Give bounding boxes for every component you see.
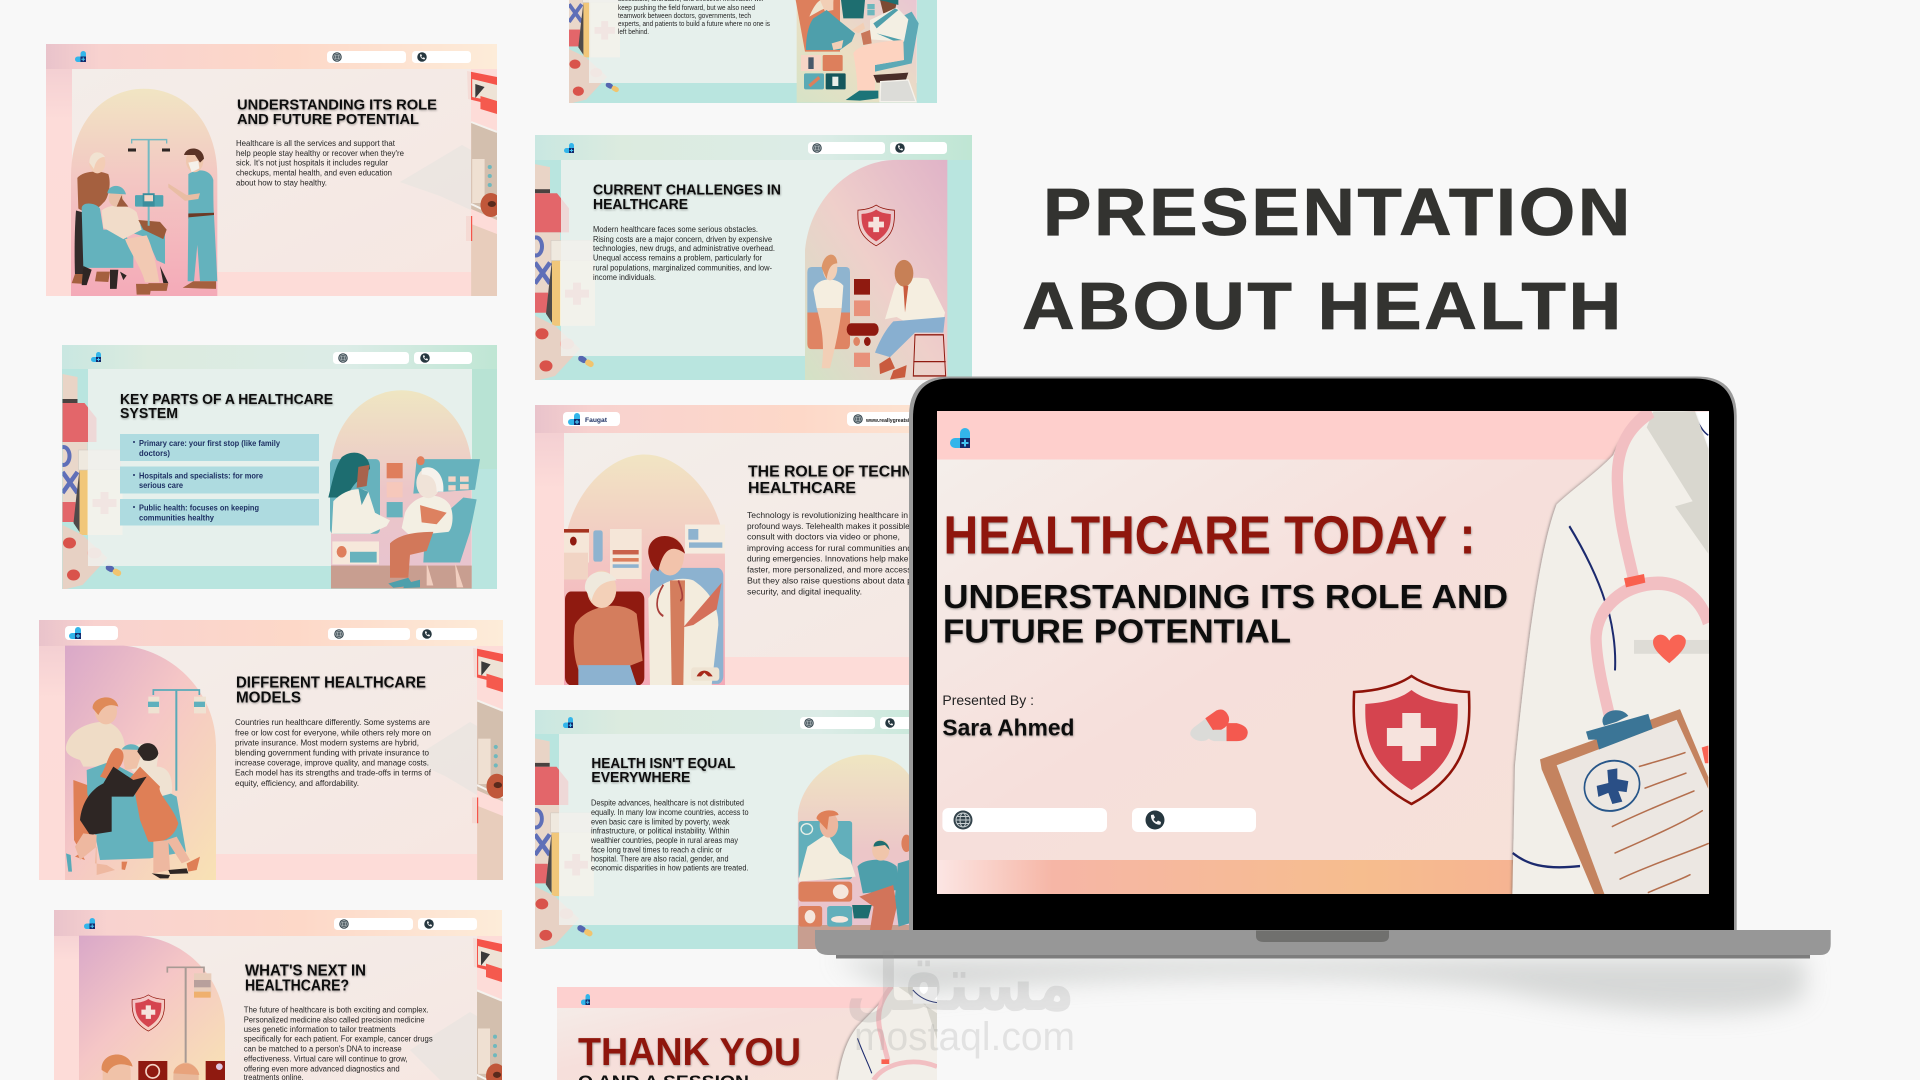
heading: DIFFERENT HEALTHCARE	[236, 674, 426, 692]
body text	[618, 0, 770, 36]
body text: teamwork between doctors, governments, tech	[618, 11, 751, 20]
heading: HEALTHCARE	[593, 197, 688, 213]
body text	[593, 225, 775, 282]
icon: brand chip with logo: Faugat	[585, 417, 608, 424]
icon: phone chip	[890, 142, 947, 154]
bullet: public health	[120, 499, 319, 526]
bullet: public health: Public health: focuses on keeping	[139, 504, 259, 512]
bullet: primary care	[120, 434, 319, 461]
body text: left behind.	[618, 27, 649, 36]
heading	[120, 392, 333, 422]
bullet: primary care: Primary care: your first stop (like family	[139, 439, 281, 448]
body text: Unequal access remains a problem, particularly for	[593, 254, 762, 263]
body text: Despite advances, healthcare is not distributed	[591, 799, 744, 808]
body text: offering even more advanced diagnostics and	[244, 1064, 400, 1073]
body text: consult with doctors via video or phone,	[747, 532, 900, 542]
body text: Each model has its strengths and trade-offs in terms of	[235, 768, 432, 778]
body text	[747, 510, 937, 596]
body text: specifically for each patient. For example, cancer drugs	[244, 1035, 433, 1044]
illustration: doctor and senior patient	[564, 454, 725, 685]
heading: HEALTH ISN'T EQUAL	[591, 755, 735, 772]
icon: website chip	[800, 717, 875, 729]
panel: slide fragment closing remarks	[565, 0, 937, 104]
icon: logo	[950, 428, 970, 448]
heading: UNDERSTANDING ITS ROLE	[237, 96, 437, 114]
body text: Modern healthcare faces some serious obstacles.	[593, 225, 758, 234]
bullet: public health: communities healthy	[139, 514, 215, 522]
presenter label: Presented By :	[942, 692, 1034, 708]
heading: CURRENT CHALLENGES IN	[593, 182, 781, 198]
panel: slide health isn't equal everywhere	[530, 710, 972, 950]
bullet: hospitals: serious care	[139, 481, 184, 490]
heading	[236, 674, 426, 706]
body text: face long travel times to reach a clinic or	[591, 845, 722, 854]
body text: free or low cost for everyone, while others rely more on	[235, 727, 431, 737]
heading	[593, 182, 781, 213]
body text	[235, 717, 432, 788]
icon: brand chip with logo	[563, 412, 620, 426]
heading: MODELS	[236, 690, 301, 706]
watermark: mostaql: mostaql.com	[854, 1015, 1075, 1059]
heading: THE ROLE OF TECHNOLOGY IN	[748, 464, 990, 480]
icon: phone chip	[414, 352, 472, 364]
phone chip	[1132, 808, 1256, 832]
bullet: hospitals	[120, 466, 319, 494]
panel: slide key parts of a healthcare system	[58, 345, 497, 590]
shadow under laptop	[835, 958, 1805, 1013]
title: presentation about health	[1022, 175, 1633, 344]
body text	[236, 139, 405, 188]
body text: increase coverage, improve quality, and manage costs.	[235, 758, 429, 768]
presenter name: Sara Ahmed	[942, 714, 1074, 740]
panel: slide current challenges in healthcare	[530, 135, 972, 381]
panel: slide understanding its role	[46, 44, 501, 297]
body text: income individuals.	[593, 273, 656, 282]
illustration: doctor coat with stethoscope and clipboard	[1512, 410, 1710, 896]
subtitle: FUTURE POTENTIAL	[943, 612, 1291, 650]
body text: effectiveness. Virtual care will continue to grow,	[244, 1054, 408, 1063]
panel: slide the role of technology in healthcare	[535, 405, 1015, 685]
icon: phone chip	[418, 918, 477, 930]
body text: checkups, mental health, and even education	[236, 168, 392, 178]
heading	[591, 755, 735, 786]
body text: uses genetic information to tailor treatments	[244, 1025, 396, 1034]
body text: blending government funding with private insurance to	[235, 748, 429, 758]
body text: even basic care is limited by poverty, weak	[591, 817, 731, 826]
body text: Personalized medicine also called precision medicine	[244, 1015, 425, 1024]
laptop base	[815, 930, 1831, 958]
icon: shield with cross	[1354, 676, 1469, 804]
website chip	[942, 808, 1107, 832]
illustration: shield, drip stand and patients	[79, 936, 225, 1080]
icon: website chip	[808, 142, 885, 154]
heading: KEY PARTS OF A HEALTHCARE	[120, 392, 333, 408]
body text: But they also raise questions about data privacy,	[747, 575, 937, 585]
title: healthcare today: HEALTHCARE TODAY :	[944, 506, 1476, 566]
body text: Rising costs are a major concern, driven by expensive	[593, 235, 773, 244]
body text: experts, and patients to build a future where no one is	[618, 19, 770, 28]
icon: website chip	[847, 412, 947, 426]
body text: profound ways. Telehealth makes it possible to	[747, 521, 919, 531]
bullet: hospitals: Hospitals and specialists: for more	[139, 472, 264, 480]
body text: sick. It's not just hospitals it includes regular	[236, 158, 388, 168]
illustration: shield with patient and doctor	[805, 160, 947, 380]
body text: wealthier countries, people in rural areas may	[590, 836, 738, 845]
panel: slide what's next in healthcare	[54, 910, 506, 1080]
body text: during emergencies. Innovations help make care	[747, 554, 927, 564]
body text: The future of healthcare is both exciting and complex.	[244, 1005, 429, 1014]
heading: AND FUTURE POTENTIAL	[237, 111, 419, 128]
body text: help people stay healthy or recover when they're	[236, 149, 405, 158]
icon: logo	[563, 717, 573, 728]
icon: website chip	[328, 628, 410, 640]
body text: about how to stay healthy.	[236, 178, 327, 188]
title: presentation about health: ABOUT HEALTH	[1022, 269, 1624, 344]
body text: rural populations, marginalized communities, and low-	[593, 263, 772, 272]
panel: slide thank you	[557, 987, 937, 1080]
heading	[748, 464, 990, 497]
watermark: mostaql: مستقل	[845, 939, 1075, 1029]
heading: SYSTEM	[120, 406, 178, 422]
body text: hospital. There are also racial, gender, and	[591, 855, 728, 864]
illustration: doctor talking to couple	[798, 755, 920, 949]
icon: logo	[91, 352, 101, 362]
body text: keep pushing the field forward, but we also need	[618, 3, 755, 12]
icon: logo	[564, 143, 574, 153]
body text: Countries run healthcare differently. Some systems are	[235, 717, 430, 727]
laptop screen	[937, 410, 1710, 896]
heading: HEALTHCARE?	[245, 978, 349, 994]
heading	[237, 99, 438, 126]
illustration: doctor and patient consultation	[796, 0, 919, 103]
illustration: doctor coat with stethoscope	[838, 987, 937, 1080]
icon: phone chip	[416, 628, 477, 640]
body text: equally. In many low income countries, access to	[591, 808, 749, 817]
body text	[244, 1005, 433, 1080]
illustration: doctor with elderly patient	[328, 390, 480, 589]
body text: can be matched to a person's DNA to increase	[244, 1044, 402, 1053]
icon: logo	[84, 918, 95, 929]
subtitle: UNDERSTANDING ITS ROLE AND	[943, 578, 1508, 615]
icon: website chip	[333, 352, 409, 364]
body text: infrastructure, or political instability. Within	[591, 827, 730, 836]
watermark: mostaql	[845, 939, 1075, 1059]
heading: thank you: THANK YOU	[578, 1031, 801, 1074]
body text	[590, 799, 749, 873]
heading: EVERYWHERE	[591, 769, 690, 786]
icon: logo chip	[65, 626, 118, 640]
laptop	[815, 376, 1831, 958]
icon: website chip: www.reallygreatsite.com	[865, 418, 926, 424]
laptop lid	[909, 376, 1737, 931]
icon: logo	[75, 51, 86, 62]
icon: capsules	[1190, 709, 1248, 741]
heading: WHAT'S NEXT IN	[245, 962, 366, 980]
body text: Healthcare is all the services and support that	[236, 139, 396, 148]
body text: faster, more personalized, and more accessible.	[747, 565, 927, 575]
illustration: family embracing patient	[65, 646, 216, 880]
icon: phone chip	[880, 717, 930, 729]
icon: website chip	[327, 51, 406, 63]
body text: security, and digital inequality.	[747, 586, 862, 596]
icon: logo	[581, 994, 590, 1005]
title: presentation about health: PRESENTATION	[1043, 175, 1633, 250]
icon: phone chip	[412, 51, 471, 63]
bullet: primary care: doctors)	[139, 449, 170, 458]
subtitle	[943, 578, 1508, 650]
body text: economic disparities in how patients are treated.	[591, 864, 748, 873]
body text: technologies, new drugs, and administrative overhead.	[593, 244, 775, 253]
panel: slide different healthcare models	[39, 620, 507, 880]
icon: website chip	[334, 918, 413, 930]
illustration: patient with family and nurse	[71, 89, 217, 297]
heading: HEALTHCARE	[748, 480, 856, 497]
body text: improving access for rural communities and	[747, 543, 912, 553]
body text: equity, efficiency, and affordability.	[235, 778, 359, 788]
heading	[245, 962, 366, 994]
body text: private insurance. Most modern systems are hybrid,	[235, 737, 419, 747]
body text: Technology is revolutionizing healthcare in	[747, 510, 908, 520]
